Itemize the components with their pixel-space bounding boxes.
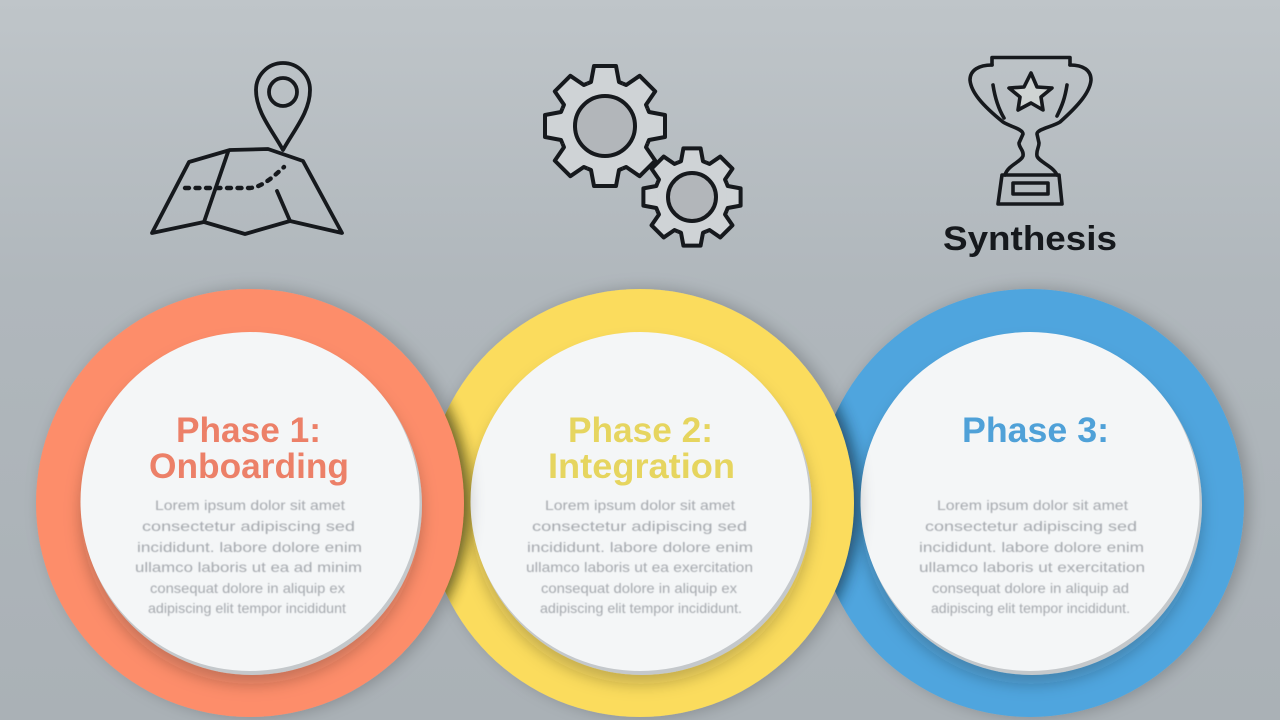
icon: map with location pin: [152, 63, 342, 234]
heading: Phase 1 Onboarding: Phase 1:: [176, 411, 321, 450]
panel: Phase 1 orange ring: [36, 289, 464, 717]
text block: Phase 2 body: [526, 497, 753, 616]
icon: large gear: [545, 66, 665, 186]
heading: Phase 2 Integration: [548, 411, 735, 486]
text block: Phase 1 body: consectetur adipiscing sed: [142, 518, 355, 534]
heading: Phase 1 Onboarding: Onboarding: [149, 447, 349, 486]
text block: Phase 3 body: [919, 497, 1145, 616]
icon: small gear: [643, 148, 741, 246]
heading: Phase 1 Onboarding: [149, 411, 349, 486]
text block: Phase 3 body: incididunt. labore dolore enim: [919, 539, 1144, 555]
text block: Phase 1 body: ullamco laboris ut ea ad minim: [135, 559, 362, 575]
text block: Phase 1 body: adipiscing elit tempor incididunt: [148, 600, 346, 616]
text block: Phase 2 body: Lorem ipsum dolor sit amet: [545, 497, 735, 513]
text block: Phase 2 body: adipiscing elit tempor incididunt.: [540, 600, 742, 616]
text block: Phase 3 body: Lorem ipsum dolor sit amet: [937, 497, 1128, 513]
heading: Synthesis: Synthesis: [943, 220, 1117, 258]
text block: Phase 3 body: consequat dolore in aliquip ad: [932, 580, 1129, 596]
icon: two gears: [545, 66, 741, 246]
heading: Phase 2 Integration: Integration: [548, 447, 735, 486]
text block: Phase 3 body: ullamco laboris ut exercitation: [919, 559, 1145, 575]
text block: Phase 2 body: incididunt. labore dolore enim: [527, 539, 753, 555]
text block: Phase 2 body: consectetur adipiscing sed: [532, 518, 747, 534]
text block: Phase 3 body: consectetur adipiscing sed: [925, 518, 1137, 534]
panel: Phase 3 blue ring: [834, 282, 1256, 720]
heading: Phase 3: Phase 3:: [962, 411, 1109, 450]
text block: Phase 2 body: ullamco laboris ut ea exercitation: [526, 559, 753, 575]
text block: Phase 1 body: consequat dolore in aliquip ex: [150, 580, 345, 596]
panel: Phase 2 yellow ring: [444, 282, 867, 720]
heading: Phase 2 Integration: Phase 2:: [568, 411, 713, 450]
text block: Phase 1 body: incididunt. labore dolore enim: [137, 539, 362, 555]
text block: Phase 1 body: [135, 497, 362, 616]
text block: Phase 1 body: Lorem ipsum dolor sit amet: [155, 497, 345, 513]
icon: trophy: [970, 58, 1091, 204]
text block: Phase 2 body: consequat dolore in aliquip ex: [541, 580, 737, 596]
text block: Phase 3 body: adipiscing elit tempor incididunt.: [931, 600, 1130, 616]
